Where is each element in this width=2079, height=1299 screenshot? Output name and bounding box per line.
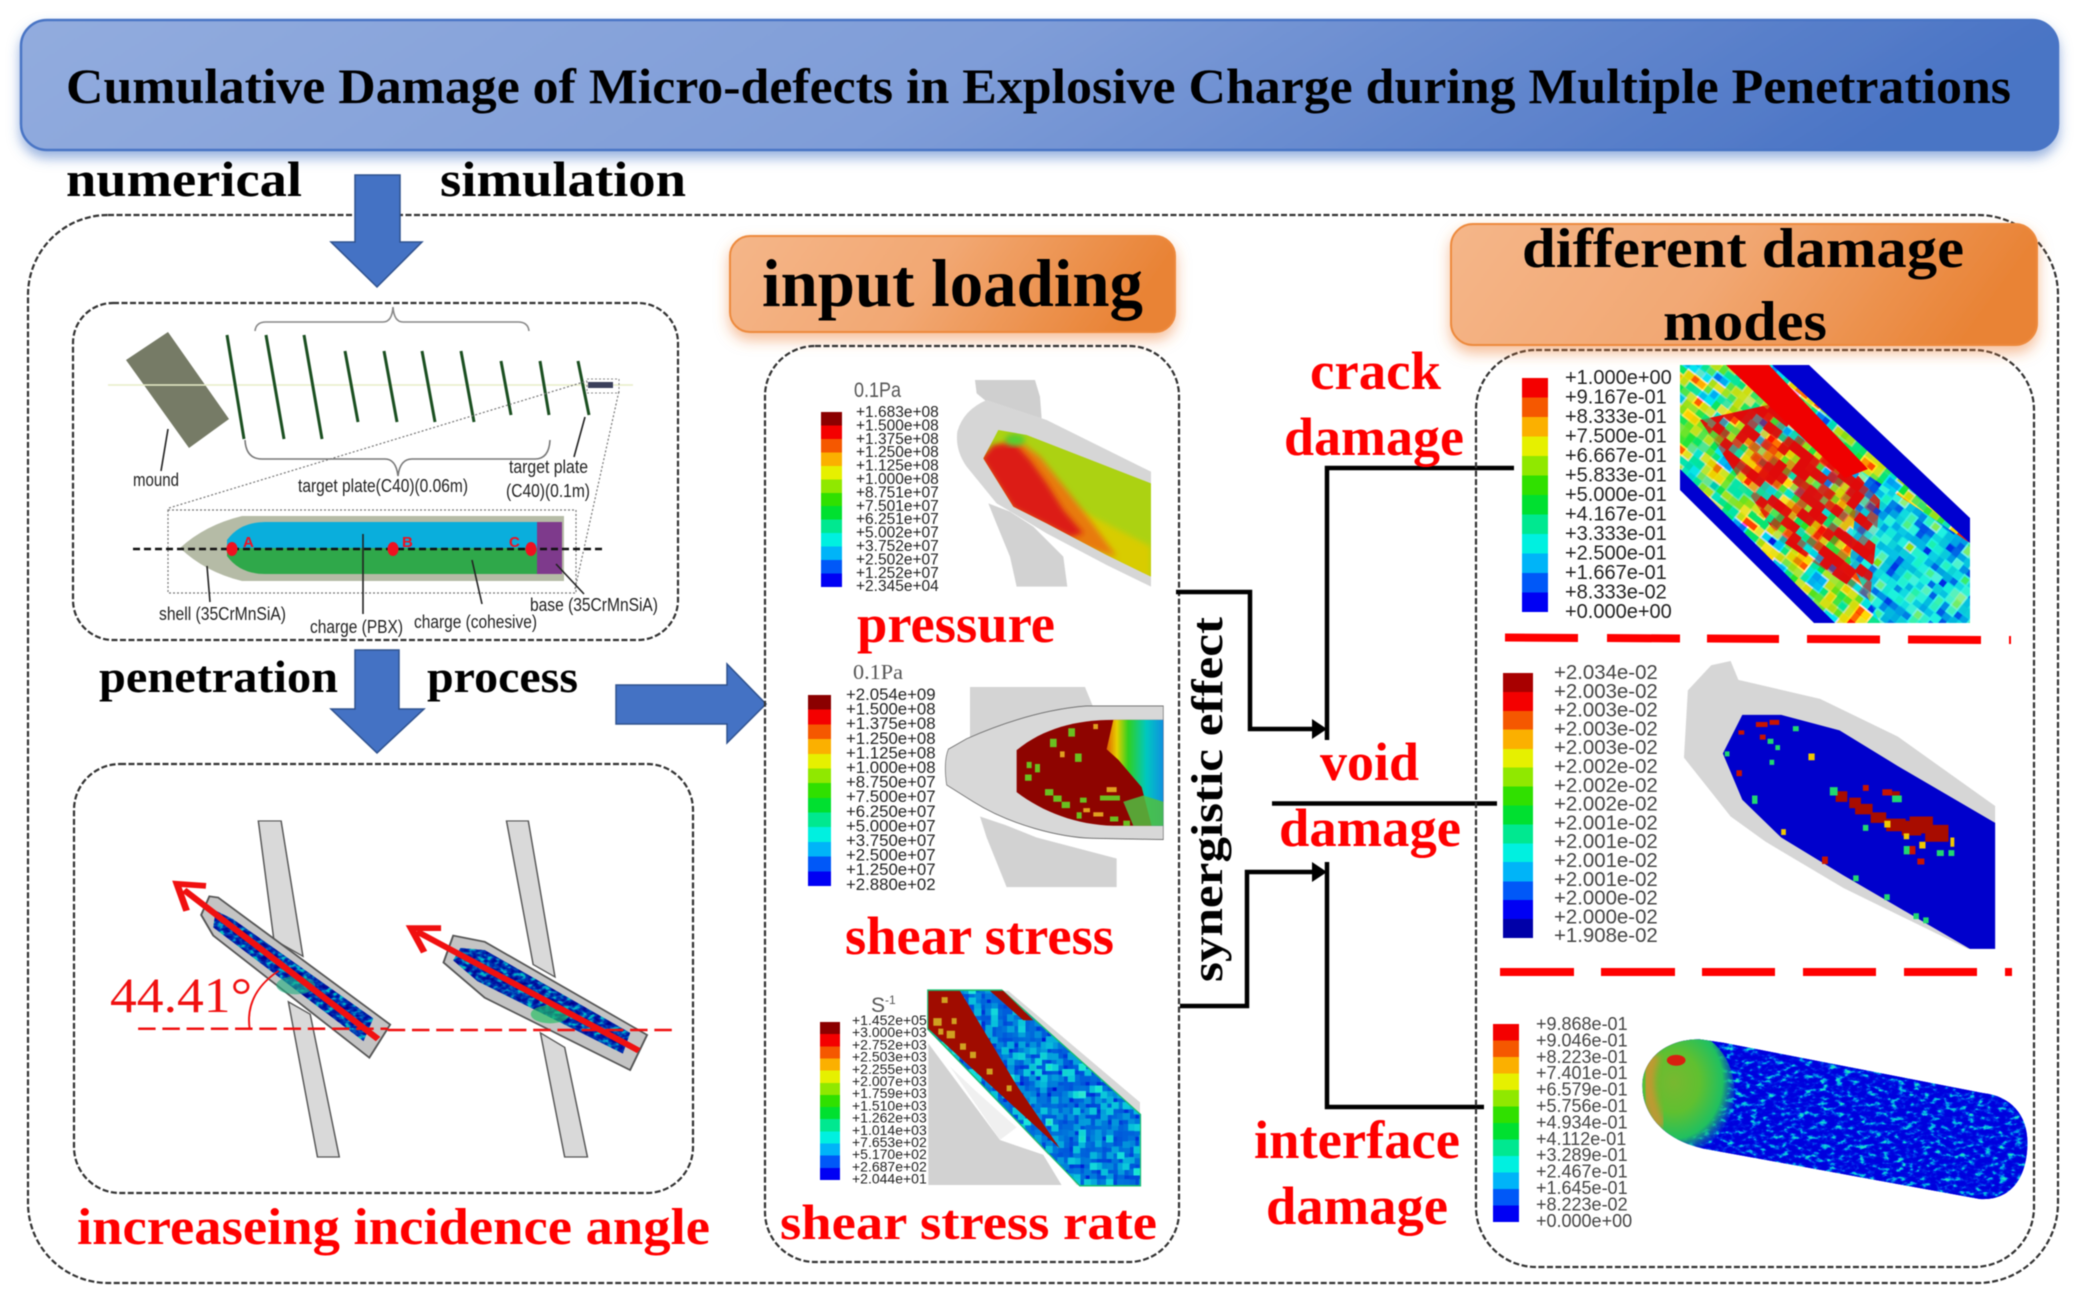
pressure legend: +1.683e+08 bbox=[856, 404, 939, 421]
projectile section bbox=[133, 516, 602, 581]
label: mound: mound bbox=[133, 470, 179, 490]
shear stress legend: +1.375e+08 bbox=[846, 714, 936, 733]
interface legend: +9.046e-01 bbox=[1536, 1030, 1628, 1050]
shear stress legend: +1.250e+07 bbox=[846, 860, 936, 879]
crack legend: +9.167e-01 bbox=[1565, 386, 1667, 408]
mound block bbox=[126, 332, 229, 448]
shear stress legend: +1.500e+08 bbox=[846, 700, 936, 719]
void legend: +2.003e-02 bbox=[1554, 737, 1658, 759]
projectile section: C bbox=[509, 534, 520, 551]
shear stress legend: +7.500e+07 bbox=[846, 787, 936, 806]
crack legend: +1.000e+00 bbox=[1565, 367, 1672, 389]
crack legend: +5.000e-01 bbox=[1565, 484, 1667, 506]
void legend: +2.002e-02 bbox=[1554, 775, 1658, 797]
void legend: +2.001e-02 bbox=[1554, 850, 1658, 872]
pressure legend: +2.345e+04 bbox=[856, 578, 939, 595]
interface legend: +8.223e-02 bbox=[1536, 1194, 1628, 1214]
shear stress legend: +2.054e+09 bbox=[846, 685, 936, 704]
interface legend: +4.112e-01 bbox=[1536, 1129, 1626, 1149]
zoom lines bbox=[169, 381, 619, 589]
interface legend: +8.223e-01 bbox=[1536, 1047, 1628, 1067]
pressure legend: +1.375e+08 bbox=[856, 431, 939, 448]
void legend: +2.034e-02 bbox=[1554, 662, 1658, 684]
heading: penetration: penetration bbox=[99, 651, 338, 702]
pressure legend: +1.500e+08 bbox=[856, 417, 939, 434]
penetration scenes bbox=[138, 821, 679, 1157]
panel: input loading bbox=[765, 346, 1179, 1262]
red divider one bbox=[1505, 638, 2011, 640]
target plates in scene bbox=[258, 821, 587, 1157]
shear stress contour bbox=[945, 687, 1163, 887]
title banner bbox=[21, 20, 2058, 150]
shear stress rate legend: +1.452e+05 bbox=[852, 1012, 927, 1028]
pressure legend: +1.252e+07 bbox=[856, 565, 939, 582]
heading: numerical: numerical bbox=[66, 151, 302, 207]
label: interface damage: interface bbox=[1254, 1110, 1460, 1170]
connector: synergistic lower to void bbox=[1180, 862, 1327, 1006]
shear stress legend: +1.125e+08 bbox=[846, 743, 936, 762]
shear stress legend: +1.250e+08 bbox=[846, 729, 936, 748]
crack legend: +7.500e-01 bbox=[1565, 426, 1667, 448]
arrow: to input loading bbox=[616, 664, 766, 743]
horizontal reference line bbox=[138, 1029, 679, 1030]
interface legend: +5.756e-01 bbox=[1536, 1096, 1628, 1116]
void legend: +2.003e-02 bbox=[1554, 718, 1658, 740]
shear stress legend bbox=[808, 660, 936, 894]
void legend: +2.000e-02 bbox=[1554, 888, 1658, 910]
panel: damage modes bbox=[1474, 348, 2036, 1269]
shear stress legend: 0.1Pa bbox=[853, 660, 904, 684]
label: interface damage: damage bbox=[1266, 1176, 1448, 1236]
interface legend: +7.401e-01 bbox=[1536, 1063, 1628, 1083]
void contour bbox=[1684, 661, 1995, 949]
leader arrows bbox=[161, 417, 585, 614]
shear stress legend: +2.880e+02 bbox=[846, 875, 936, 894]
void legend: +2.002e-02 bbox=[1554, 756, 1658, 778]
label: crack damage: crack bbox=[1310, 341, 1441, 401]
void legend bbox=[1503, 662, 1658, 947]
shear stress rate legend: +1.510e+03 bbox=[852, 1097, 927, 1113]
heading text: input loading bbox=[762, 245, 1143, 321]
interface contour cylinder bbox=[1629, 1031, 2030, 1203]
pressure legend: +1.250e+08 bbox=[856, 444, 939, 461]
shear stress rate legend: +2.503e+03 bbox=[852, 1049, 927, 1065]
void legend: +2.001e-02 bbox=[1554, 812, 1658, 834]
pressure legend: +5.002e+07 bbox=[856, 525, 939, 542]
label: target plate 0.06m: target plate(C40)(0.06m) bbox=[298, 476, 468, 496]
shear stress rate contour bbox=[927, 989, 1143, 1186]
projectile two bbox=[444, 936, 647, 1070]
shear stress legend: +8.750e+07 bbox=[846, 773, 936, 792]
shear stress legend: +6.250e+07 bbox=[846, 802, 936, 821]
interface legend: +3.289e-01 bbox=[1536, 1145, 1628, 1165]
connector: crack damage branch bbox=[1327, 468, 1514, 740]
panel: simulation model bbox=[73, 303, 678, 640]
pressure legend: 0.1Pa bbox=[854, 379, 901, 402]
banner: input loading bbox=[730, 236, 1175, 332]
interface legend bbox=[1493, 1014, 1632, 1231]
shear stress rate legend: +1.014e+03 bbox=[852, 1122, 927, 1138]
label: shear stress rate: shear stress rate bbox=[780, 1194, 1157, 1250]
label: target plate 0.1m: target plate bbox=[509, 457, 588, 477]
void legend: +2.002e-02 bbox=[1554, 794, 1658, 816]
crack legend: +8.333e-02 bbox=[1565, 582, 1667, 604]
pressure contour bbox=[957, 380, 1151, 587]
label: crack damage: damage bbox=[1284, 407, 1464, 467]
label: void damage: void bbox=[1320, 732, 1419, 792]
crack contour bbox=[1679, 364, 1971, 624]
panel: penetration process bbox=[74, 764, 693, 1193]
shear stress rate legend: +2.044e+01 bbox=[852, 1171, 927, 1187]
pressure legend: +1.125e+08 bbox=[856, 458, 939, 475]
shear stress rate legend: +2.687e+02 bbox=[852, 1158, 927, 1174]
interface legend: +4.934e-01 bbox=[1536, 1112, 1628, 1132]
heading: process: process bbox=[427, 651, 578, 702]
label: base: base (35CrMnSiA) bbox=[530, 595, 658, 615]
void legend: +2.001e-02 bbox=[1554, 831, 1658, 853]
angle arc bbox=[249, 971, 279, 1029]
void legend: +2.003e-02 bbox=[1554, 681, 1658, 703]
label: void damage: damage bbox=[1279, 798, 1461, 858]
crack legend: +3.333e-01 bbox=[1565, 523, 1667, 545]
label: shear stress: shear stress bbox=[845, 906, 1114, 966]
crack legend: +0.000e+00 bbox=[1565, 601, 1672, 623]
red direction arrows bbox=[177, 884, 639, 1051]
shear stress legend: +3.750e+07 bbox=[846, 831, 936, 850]
label: shell: shell (35CrMnSiA) bbox=[159, 604, 286, 624]
crack legend: +5.833e-01 bbox=[1565, 464, 1667, 486]
crack legend bbox=[1522, 367, 1672, 623]
pressure legend: +1.000e+08 bbox=[856, 471, 939, 488]
shear stress rate legend: +3.000e+03 bbox=[852, 1024, 927, 1040]
label: synergistic effect: synergistic effect bbox=[1183, 617, 1232, 982]
connector: void damage branch bbox=[1272, 801, 1497, 806]
shear stress rate legend: +2.007e+03 bbox=[852, 1073, 927, 1089]
title: Cumulative Damage of Micro-defects in Explosive Charge during Multiple Penetrations bbox=[66, 58, 2011, 114]
shear stress rate legend: -1 bbox=[885, 993, 896, 1007]
shear stress legend: +5.000e+07 bbox=[846, 816, 936, 835]
crack legend: +6.667e-01 bbox=[1565, 445, 1667, 467]
projectile section: A bbox=[243, 534, 254, 551]
interface legend: +9.868e-01 bbox=[1536, 1014, 1628, 1034]
projectile one bbox=[201, 896, 390, 1058]
shear stress legend: +1.000e+08 bbox=[846, 758, 936, 777]
void legend: +2.003e-02 bbox=[1554, 700, 1658, 722]
interface legend: +1.645e-01 bbox=[1536, 1178, 1628, 1198]
interface legend: +2.467e-01 bbox=[1536, 1162, 1628, 1182]
shear stress rate legend: +2.255e+03 bbox=[852, 1061, 927, 1077]
arrow: numerical simulation down bbox=[331, 175, 422, 287]
target plates bbox=[227, 335, 589, 439]
interface legend: +0.000e+00 bbox=[1536, 1211, 1632, 1231]
shear stress rate legend bbox=[820, 993, 927, 1187]
crack legend: +2.500e-01 bbox=[1565, 542, 1667, 564]
angle value: 44.41° bbox=[110, 967, 252, 1023]
label: charge cohesive: charge (cohesive) bbox=[414, 612, 537, 632]
shear stress rate legend: +5.170e+02 bbox=[852, 1146, 927, 1162]
connector: synergistic upper to void bbox=[1176, 592, 1327, 739]
crack legend: +8.333e-01 bbox=[1565, 406, 1667, 428]
label: target plate 0.1m: (C40)(0.1m) bbox=[506, 481, 590, 501]
connector: interface damage branch bbox=[1327, 862, 1484, 1107]
void legend: +1.908e-02 bbox=[1554, 925, 1658, 947]
caption: increasing incidence angle: increaseing incidence angle bbox=[77, 1199, 710, 1256]
arrow: penetration down bbox=[331, 650, 424, 753]
pressure legend: +2.502e+07 bbox=[856, 551, 939, 568]
bottom brace bbox=[245, 440, 550, 476]
shear stress legend: +2.500e+07 bbox=[846, 846, 936, 865]
red divider two bbox=[1500, 968, 2012, 976]
heading: simulation: simulation bbox=[440, 151, 686, 207]
crack legend: +4.167e-01 bbox=[1565, 504, 1667, 526]
heading text: modes bbox=[1663, 291, 1827, 353]
pressure legend: +3.752e+07 bbox=[856, 538, 939, 555]
projectile section: B bbox=[402, 534, 413, 551]
banner: different damage modes bbox=[1451, 218, 2037, 353]
shear stress rate legend: +7.653e+02 bbox=[852, 1134, 927, 1150]
detail box bbox=[168, 510, 576, 593]
pressure legend: +6.251e+07 bbox=[856, 511, 939, 528]
top brace bbox=[255, 307, 529, 331]
pressure legend: +8.751e+07 bbox=[856, 484, 939, 501]
void legend: +2.000e-02 bbox=[1554, 906, 1658, 928]
void legend: +2.001e-02 bbox=[1554, 869, 1658, 891]
axis line bbox=[108, 384, 633, 386]
label: pressure: pressure bbox=[857, 594, 1055, 654]
shear stress rate legend: +1.262e+03 bbox=[852, 1110, 927, 1126]
shear stress rate legend: +1.759e+03 bbox=[852, 1085, 927, 1101]
pressure legend: +7.501e+07 bbox=[856, 498, 939, 515]
pressure legend bbox=[821, 379, 939, 595]
interface legend: +6.579e-01 bbox=[1536, 1080, 1628, 1100]
projectile miniature bbox=[587, 379, 619, 393]
shear stress rate legend: S bbox=[871, 994, 885, 1017]
heading text: different damage bbox=[1522, 218, 1964, 280]
shear stress rate legend: +2.752e+03 bbox=[852, 1036, 927, 1052]
crack legend: +1.667e-01 bbox=[1565, 562, 1667, 584]
label: charge PBX: charge (PBX) bbox=[310, 617, 403, 637]
